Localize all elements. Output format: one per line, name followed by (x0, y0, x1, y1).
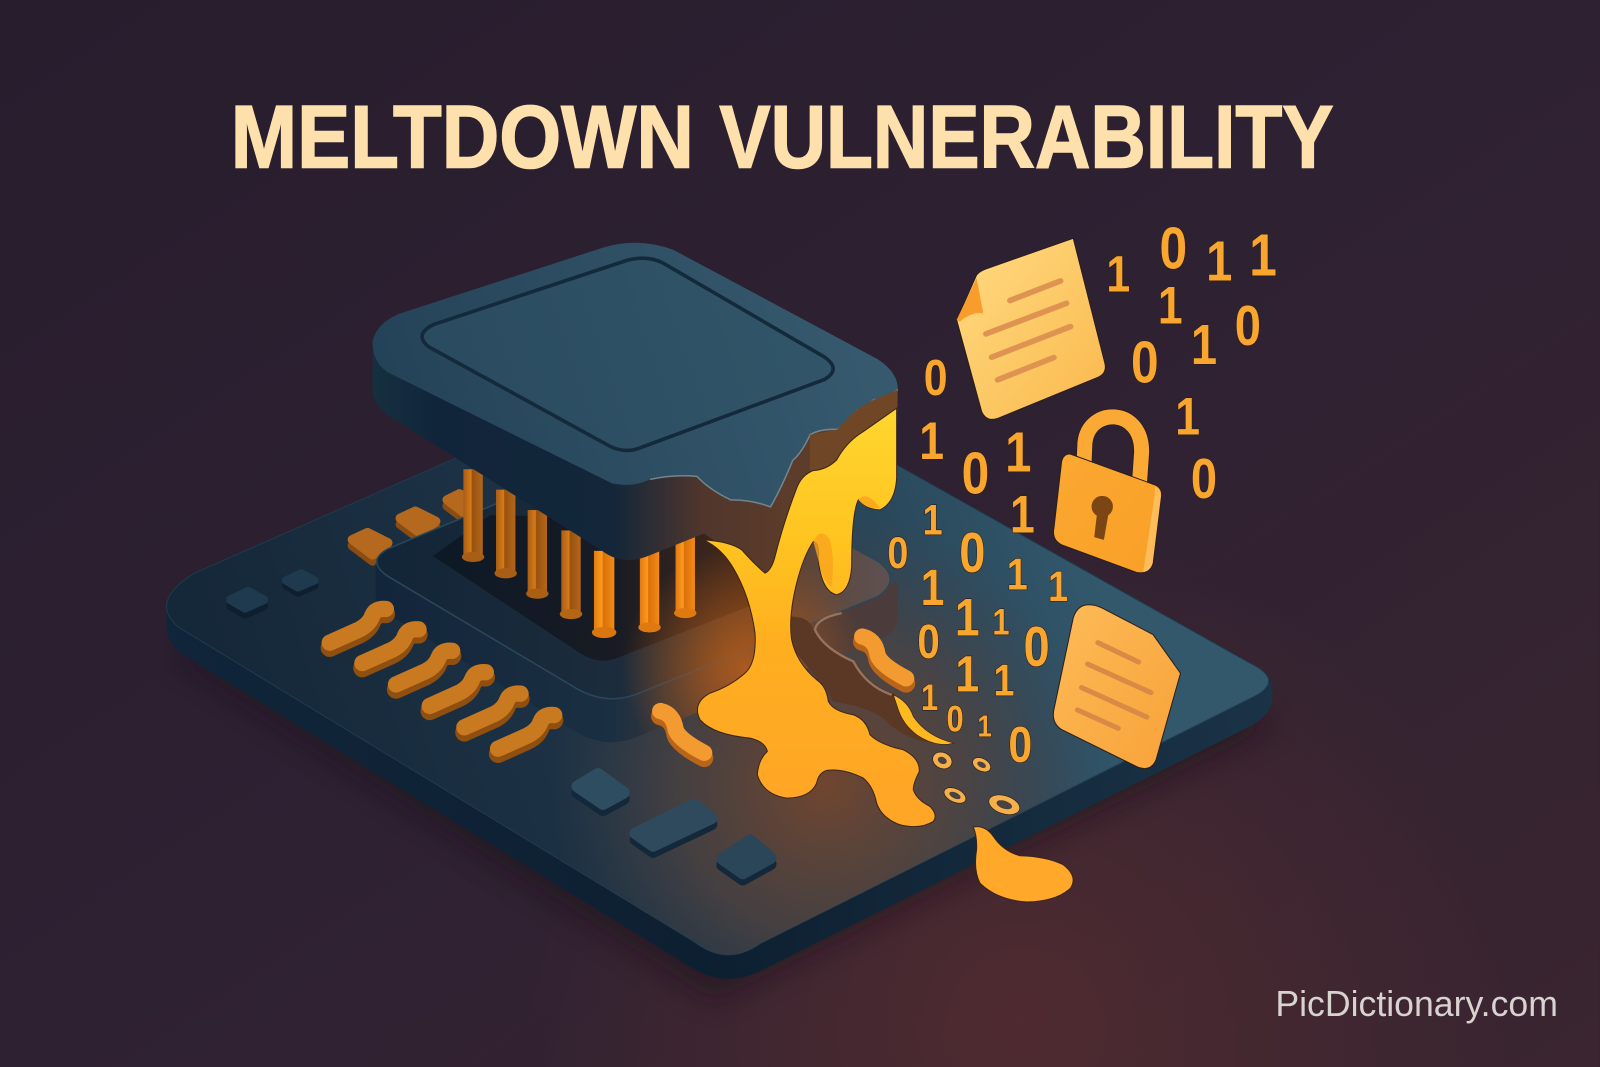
text lines (1077, 643, 1151, 728)
board side (167, 604, 1272, 979)
square pads on board (231, 573, 770, 879)
binary digits: 1 (1005, 420, 1031, 483)
title: VULNERABILITY (719, 87, 1334, 186)
binary digits: 1 (919, 412, 944, 471)
gull-wing leads, right side (660, 637, 906, 758)
binary digits: 1 (1191, 313, 1217, 376)
socket heat glow (630, 558, 855, 731)
binary digits: 1 (921, 558, 945, 616)
folded corner (957, 278, 983, 322)
binary digits (887, 215, 1277, 773)
brown scorched trail (790, 616, 952, 744)
icon: document, top (957, 238, 1105, 419)
binary digits: 0 (959, 521, 985, 584)
chip body (373, 243, 898, 576)
binary digits: 0 (1160, 215, 1187, 281)
socket side (376, 563, 898, 742)
binary digits: 1 (1158, 277, 1183, 335)
binary digits: 0 (962, 441, 989, 507)
watermark: PicDictionary.com (1275, 984, 1558, 1024)
binary digits: 1 (921, 677, 938, 719)
socket recess (433, 515, 760, 661)
ragged melted edge (650, 390, 898, 507)
circuit board (166, 458, 1272, 996)
chip socket (376, 496, 898, 742)
binary digits: 1 (992, 602, 1010, 643)
binary digits: 1 (977, 708, 992, 743)
binary digits: 1 (1007, 548, 1028, 599)
keyhole (1092, 496, 1113, 517)
binary digits: 0 (887, 527, 908, 578)
icon: padlock (1053, 417, 1162, 573)
melted ring digits (930, 749, 1022, 818)
chip pins (462, 469, 696, 638)
shackle (1084, 417, 1142, 487)
chip inset square (422, 258, 833, 450)
binary digits: 1 (955, 589, 980, 647)
molten drop off the board edge (973, 827, 1073, 902)
main melt body (697, 408, 935, 827)
brown melted band (810, 390, 897, 475)
title (231, 87, 1333, 186)
binary digits: 1 (1206, 230, 1232, 292)
binary digits: 0 (946, 699, 964, 740)
binary digits: 0 (1235, 294, 1261, 357)
binary digits: 1 (923, 497, 943, 544)
binary digits: 1 (1106, 245, 1130, 303)
binary digits: 1 (1048, 563, 1068, 611)
binary digits: 0 (917, 616, 940, 669)
gull-wing leads, front row (330, 609, 554, 754)
body (1053, 454, 1162, 573)
chip side wall (373, 342, 898, 576)
title: MELTDOWN (231, 87, 694, 186)
binary digits: 1 (1175, 388, 1200, 446)
binary digits: 0 (924, 348, 948, 406)
heat glow on board (585, 563, 1064, 955)
binary digits: 1 (1010, 486, 1035, 544)
binary digits: 0 (1024, 615, 1050, 678)
yellow trickle (893, 695, 954, 744)
binary digits: 0 (1008, 715, 1032, 773)
board shadow (174, 510, 1275, 1000)
chip top face (373, 243, 898, 507)
binary digits: 1 (955, 645, 979, 702)
binary digits: 1 (994, 655, 1014, 705)
binary digits: 0 (1191, 447, 1217, 510)
binary digits: 0 (1131, 329, 1159, 396)
board top surface (167, 358, 1269, 955)
melt shading (813, 496, 880, 586)
trail highlight line (815, 613, 892, 695)
socket top (377, 439, 890, 699)
text lines (986, 281, 1071, 380)
melting metal (697, 390, 954, 827)
orange block pads, rear row (352, 494, 478, 561)
icon: document, lower (1053, 605, 1180, 769)
binary digits: 1 (1249, 222, 1277, 288)
